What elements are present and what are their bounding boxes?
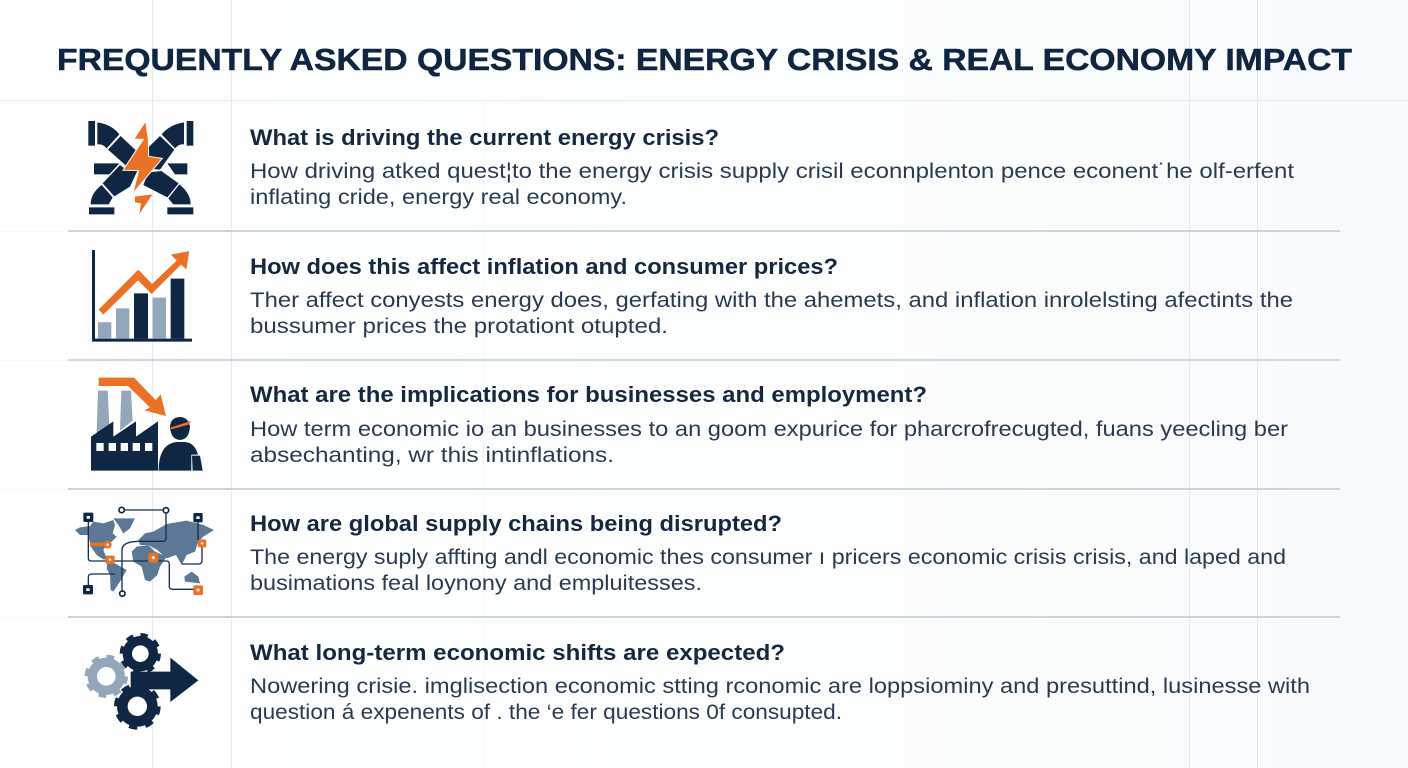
answer text: Nowering crisie. imglisection economic stting rconomic are loppsiominy and presuttind, lusinesse with <box>250 674 1310 698</box>
panel: energy crisis drivers <box>88 121 1294 214</box>
panel: inflation and consumer prices <box>92 250 1293 342</box>
question heading: How does this affect inflation and consumer prices? <box>250 254 838 279</box>
answer text: absechanting, wr this intinflations. <box>250 443 614 467</box>
question heading: What long-term economic shifts are expected? <box>250 640 785 665</box>
answer text <box>250 288 1293 338</box>
panel: global supply chains <box>75 507 1286 596</box>
answer text: inflating cride, energy real economy. <box>250 185 627 209</box>
question heading: What are the implications for businesses and employment? <box>250 382 927 407</box>
answer text <box>250 159 1294 209</box>
question heading: How are global supply chains being disrupted? <box>250 511 782 536</box>
answer text: question á expenents of . the ‘e fer questions 0f consupted. <box>250 700 842 724</box>
answer text: busimations feal loynony and empluitesses. <box>250 571 702 595</box>
panel: long-term economic shifts <box>88 636 1310 727</box>
answer text: Ther affect conyests energy does, gerfating with the ahemets, and inflation inrolelsting afectints the <box>250 288 1293 312</box>
icon: crossed pipes with lightning bolt <box>88 121 193 214</box>
title: FREQUENTLY ASKED QUESTIONS: ENERGY CRISIS & REAL ECONOMY IMPACT <box>57 43 1352 77</box>
answer text: bussumer prices the protationt otupted. <box>250 314 668 338</box>
answer text <box>250 674 1310 724</box>
icon: world map with network nodes <box>75 507 214 596</box>
question heading: What is driving the current energy crisis? <box>250 125 719 150</box>
icon: gears with forward arrow <box>88 636 198 727</box>
answer text <box>250 545 1286 595</box>
icon: rising bar chart with arrow <box>92 250 192 342</box>
answer text <box>250 417 1288 467</box>
panel: businesses and employment <box>91 378 1288 471</box>
answer text: The energy suply affting andl economic thes consumer ı pricers economic crisis crisis, and laped and <box>250 545 1286 569</box>
icon: factory, worker and falling arrow <box>91 378 203 471</box>
answer text: How driving atked quest¦to the energy crisis supply crisil econnplenton pence econent˙he olf-erfent <box>250 159 1294 183</box>
answer text: How term economic io an businesses to an goom expurice for pharcrofrecugted, fuans yeecling ber <box>250 417 1288 441</box>
